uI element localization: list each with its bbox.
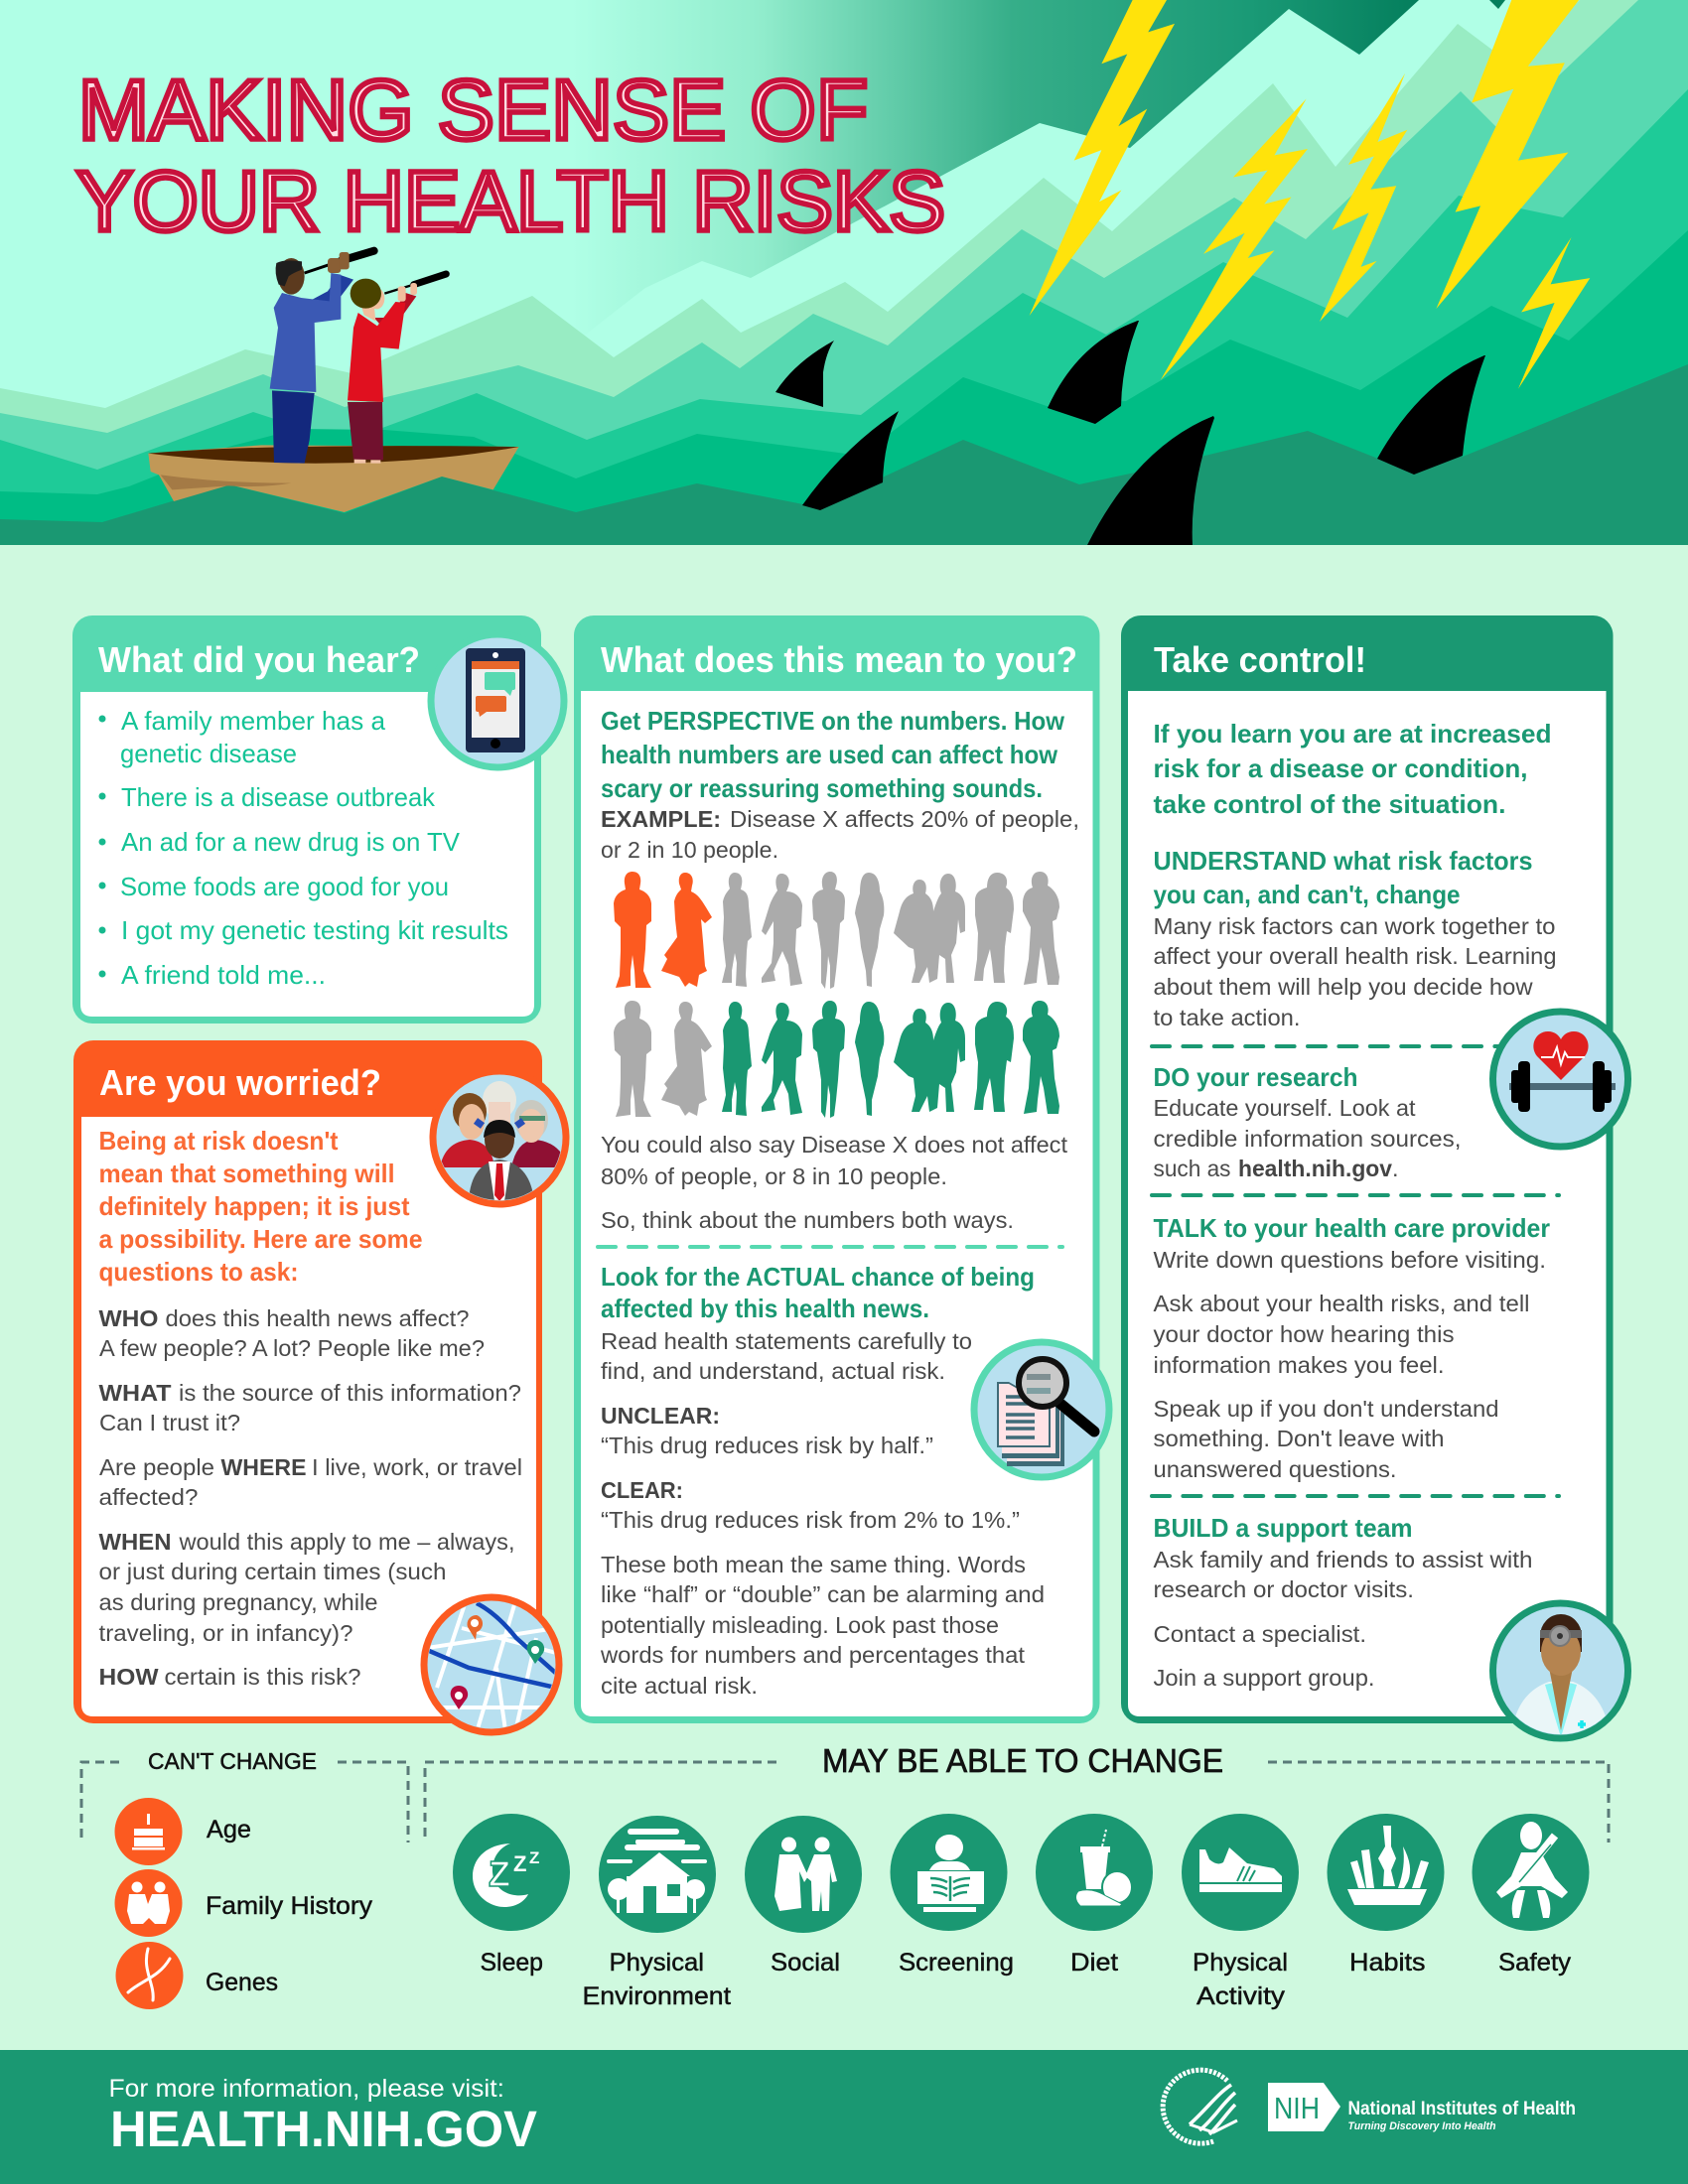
text: do your research: such as	[1154, 1156, 1231, 1181]
text: look for the actual chance: “This drug reduces risk from 2% to 1%.”	[601, 1507, 1020, 1533]
icon and label: habits	[1327, 1814, 1444, 1977]
questions to ask	[99, 1305, 522, 1690]
questions to ask: or just during certain times (such	[99, 1559, 447, 1584]
text: build a support team: research or doctor visits.	[1154, 1576, 1414, 1602]
text: look for the actual chance: Read health statements carefully to	[601, 1328, 972, 1354]
logo: NIH	[1268, 2083, 1576, 2132]
bullet list: things you may hear: There is a disease outbreak	[121, 782, 436, 812]
orange intro text: definitely happen; it is just	[99, 1191, 410, 1221]
icon and label: social: Social	[771, 1949, 840, 1977]
icon and label: sleep	[453, 1814, 570, 1977]
logo: HHS eagle	[1163, 2070, 1237, 2143]
bullet list: things you may hear: A friend told me...	[121, 960, 326, 990]
bracket: can't change	[81, 1762, 408, 1843]
questions to ask: Are people	[99, 1454, 214, 1480]
pictogram: 8 in 10 people not affected	[614, 1001, 1059, 1118]
heading: take control: Take control!	[1154, 639, 1366, 680]
questions to ask: WHEN	[99, 1529, 171, 1555]
icon and label: sleep: Sleep	[481, 1949, 543, 1977]
text: talk to your provider: Write down questions before visiting.	[1154, 1247, 1546, 1273]
bullet list: things you may hear: A family member has a	[121, 706, 386, 736]
text: perspective on the numbers	[601, 706, 1079, 863]
footer: more information: For more information, please visit:	[109, 2075, 504, 2103]
footer: more information: HEALTH.NIH.GOV	[110, 2101, 537, 2157]
footer band	[0, 2050, 1688, 2184]
questions to ask: A few people? A lot? People like me?	[99, 1335, 485, 1361]
icon and label: diet: Diet	[1070, 1949, 1118, 1977]
icon and label: habits: Habits	[1349, 1949, 1426, 1977]
logo: NIH: National Institutes of Health	[1348, 2099, 1576, 2119]
icon and label: screening	[890, 1814, 1014, 1977]
footer: more information	[109, 2075, 537, 2157]
questions to ask: as during pregnancy, while	[99, 1589, 377, 1615]
text: look for the actual chance: like “half” or “double” can be alarming and	[601, 1581, 1045, 1607]
text: do your research: credible information sources,	[1154, 1126, 1462, 1152]
orange intro text: a possibility. Here are some	[99, 1224, 423, 1254]
text: think both ways: You could also say Disease X does not affect	[601, 1132, 1067, 1158]
icon: doctor portrait	[1493, 1603, 1628, 1738]
text: talk to your provider	[1154, 1213, 1550, 1482]
text: perspective on the numbers: Disease X affects 20% of people,	[730, 806, 1079, 832]
icon and label: safety: Safety	[1498, 1949, 1572, 1977]
icon and label: diet	[1036, 1814, 1153, 1977]
bullet list: things you may hear: An ad for a new drug is on TV	[121, 827, 461, 857]
text: look for the actual chance: words for numbers and percentages that	[600, 1642, 1025, 1668]
illustration: two people on a boat with telescopes	[148, 251, 519, 512]
questions to ask: Can I trust it?	[99, 1410, 240, 1435]
text: perspective on the numbers: scary or reassuring something sounds.	[601, 773, 1043, 803]
heading: what did you hear: What did you hear?	[98, 639, 420, 680]
text: look for the actual chance: These both mean the same thing. Words	[601, 1552, 1026, 1577]
text: understand risk factors: affect your overall health risk. Learning	[1154, 943, 1557, 969]
icon: map with pins	[424, 1597, 566, 1737]
text: look for the actual chance: find, and understand, actual risk.	[601, 1358, 945, 1384]
text: think both ways	[601, 1132, 1067, 1233]
questions to ask: would this apply to me – always,	[178, 1529, 514, 1555]
title	[76, 64, 945, 249]
text: think both ways: 80% of people, or 8 in 10 people.	[601, 1163, 947, 1189]
text: build a support team: Ask family and friends to assist with	[1154, 1547, 1533, 1572]
bullet list: things you may hear: I got my genetic testing kit results	[121, 915, 508, 945]
text: talk to your provider: TALK to your health care provider	[1154, 1213, 1550, 1243]
text: perspective on the numbers: health numbers are used can affect how	[601, 740, 1058, 769]
icon and label: social	[745, 1816, 862, 1977]
text: look for the actual chance: UNCLEAR:	[601, 1403, 720, 1429]
icon: group of people	[433, 1071, 568, 1204]
icon and label: age: Age	[207, 1816, 251, 1843]
icon and label: sleep: Z	[489, 1853, 510, 1894]
text: talk to your provider: information makes you feel.	[1154, 1352, 1444, 1378]
icon: heart and barbell	[1493, 1012, 1628, 1147]
text: look for the actual chance: “This drug reduces risk by half.”	[601, 1433, 933, 1458]
questions to ask: does this health news affect?	[165, 1305, 469, 1331]
text: build a support team: BUILD a support team	[1154, 1513, 1412, 1543]
icon and label: screening: Screening	[899, 1949, 1014, 1977]
icon and label: physical activity	[1182, 1814, 1299, 2010]
text: understand risk factors: you can, and can't, change	[1154, 880, 1460, 909]
text: look for the actual chance: potentially misleading. Look past those	[601, 1612, 999, 1638]
text: talk to your provider: unanswered questions.	[1154, 1456, 1396, 1482]
text: do your research: Educate yourself. Look at	[1154, 1095, 1416, 1121]
questions to ask: HOW	[99, 1664, 159, 1690]
text: talk to your provider: Ask about your health risks, and tell	[1154, 1291, 1529, 1316]
text: if you learn: risk for a disease or condition,	[1154, 753, 1527, 783]
orange intro text: questions to ask:	[99, 1257, 298, 1287]
icon and label: physical environment: Physical	[610, 1949, 704, 1977]
questions to ask: WHO	[99, 1305, 159, 1331]
text: do your research: .	[1392, 1156, 1399, 1181]
shark fins	[775, 321, 1485, 545]
icon and label: physical activity: Activity	[1196, 1982, 1286, 2010]
icon and label: physical activity: Physical	[1193, 1949, 1288, 1977]
icon and label: sleep: Z	[529, 1848, 539, 1867]
text: understand risk factors: Many risk factors can work together to	[1154, 913, 1555, 939]
panel: are you worried	[73, 1040, 568, 1737]
lightning bolts	[1030, 0, 1590, 389]
questions to ask: WHERE	[220, 1454, 306, 1480]
logo: NIH: NIH	[1274, 2091, 1320, 2125]
icon and label: sleep: Z	[513, 1851, 526, 1876]
text: build a support team	[1154, 1513, 1533, 1691]
questions to ask: WHAT	[99, 1380, 172, 1406]
text: do your research: DO your research	[1154, 1062, 1358, 1092]
text: understand risk factors	[1154, 846, 1557, 1030]
text: do your research: health.nih.gov	[1238, 1156, 1392, 1181]
bullet list: things you may hear	[99, 706, 508, 990]
logo: NIH: Turning Discovery Into Health	[1348, 2120, 1496, 2132]
icon and label: physical environment	[582, 1816, 731, 2010]
questions to ask: I live, work, or travel	[312, 1454, 522, 1480]
text: understand risk factors: about them will help you decide how	[1154, 974, 1534, 1000]
questions to ask: certain is this risk?	[165, 1664, 361, 1690]
icon and label: family history: Family History	[206, 1892, 373, 1920]
text: build a support team: Join a support group.	[1154, 1665, 1374, 1691]
text: talk to your provider: your doctor how hearing this	[1154, 1321, 1454, 1347]
heading: are you worried: Are you worried?	[99, 1062, 381, 1103]
panel: what does this mean to you	[574, 615, 1109, 1723]
text: think both ways: So, think about the numbers both ways.	[601, 1207, 1014, 1233]
title: YOUR HEALTH RISKS	[76, 155, 945, 249]
icon and label: safety	[1472, 1814, 1589, 1977]
title: MAKING SENSE OF	[78, 64, 868, 158]
text: perspective on the numbers: EXAMPLE:	[601, 806, 721, 832]
icon and label: physical environment: Environment	[582, 1982, 731, 2010]
text: look for the actual chance: Look for the ACTUAL chance of being	[601, 1262, 1035, 1292]
heading: may be able to change: MAY BE ABLE TO CHANGE	[822, 1742, 1223, 1779]
icon and label: genes	[115, 1942, 278, 2009]
text: look for the actual chance: affected by this health news.	[601, 1294, 929, 1323]
text: perspective on the numbers: or 2 in 10 people.	[601, 837, 778, 863]
text: talk to your provider: Speak up if you don't understand	[1154, 1396, 1499, 1422]
icon: magnifier over documents	[974, 1342, 1109, 1477]
panel: take control	[1121, 615, 1628, 1738]
text: look for the actual chance: cite actual risk.	[601, 1673, 758, 1699]
text: understand risk factors: UNDERSTAND what risk factors	[1154, 846, 1533, 876]
text: talk to your provider: something. Don't leave with	[1154, 1426, 1444, 1451]
icon and label: age	[115, 1798, 251, 1865]
heading: can't change: CAN'T CHANGE	[148, 1748, 317, 1774]
questions to ask: traveling, or in infancy)?	[99, 1620, 353, 1646]
orange intro text: mean that something will	[99, 1159, 395, 1188]
heading: what does this mean to you: What does this mean to you?	[601, 639, 1077, 680]
bracket: may be able to change	[425, 1762, 1609, 1843]
text: if you learn	[1154, 719, 1551, 819]
text: build a support team: Contact a specialist.	[1154, 1621, 1366, 1647]
text: look for the actual chance: CLEAR:	[601, 1477, 683, 1503]
bullet list: things you may hear: genetic disease	[120, 739, 297, 768]
questions to ask: is the source of this information?	[179, 1380, 521, 1406]
text: perspective on the numbers: Get PERSPECTIVE on the numbers. How	[601, 706, 1065, 736]
bullet list: things you may hear: Some foods are good for you	[120, 872, 449, 901]
text: look for the actual chance	[600, 1262, 1045, 1699]
text: understand risk factors: to take action.	[1154, 1005, 1301, 1030]
icon and label: family history	[115, 1869, 373, 1937]
hero illustration	[0, 0, 1688, 545]
pictogram: 2 in 10 people affected	[614, 872, 1059, 989]
icon and label: genes: Genes	[206, 1969, 278, 1996]
text: if you learn: take control of the situation.	[1154, 789, 1505, 819]
questions to ask: affected?	[99, 1484, 199, 1510]
orange intro text	[99, 1126, 423, 1287]
panel: what did you hear	[72, 615, 564, 1024]
orange intro text: Being at risk doesn't	[99, 1126, 339, 1156]
text: do your research	[1154, 1062, 1462, 1181]
icon: phone with chat bubbles	[431, 634, 564, 767]
text: if you learn: If you learn you are at increased	[1154, 719, 1551, 749]
